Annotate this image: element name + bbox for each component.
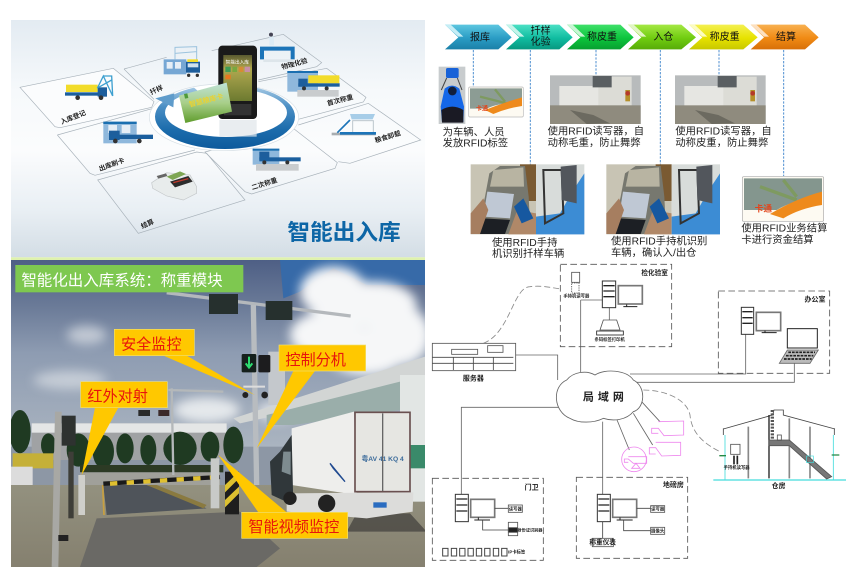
truck	[270, 412, 427, 532]
callout: infrared beam	[81, 382, 167, 475]
caption: tare weighing: 动称皮重，防止舞弊	[675, 136, 768, 149]
chevron: settlement	[751, 25, 819, 49]
tile: vehicle registration: 入库登记	[59, 108, 87, 126]
room: gate: IP卡标签	[508, 549, 526, 556]
icon: first weighbridge truck	[287, 71, 340, 97]
caption: gross weighing: 使用RFID读写器，自	[548, 125, 644, 138]
icon: lab bench with person	[260, 33, 295, 62]
callout: safety monitoring	[114, 329, 255, 395]
chevron: report	[445, 25, 512, 49]
tile: lab test	[212, 34, 322, 80]
panel: intelligent warehousing diagram	[11, 20, 425, 261]
tile: sampling	[124, 57, 167, 99]
wireless links	[483, 286, 720, 452]
caption: gross weighing: 动称毛重，防止舞弊	[548, 136, 641, 149]
callout: infrared beam: 红外对射	[87, 388, 148, 405]
photo background: sky and scene	[9, 260, 430, 567]
panel: RFID process flow	[439, 24, 827, 260]
chevron: enter warehouse: 入仓	[653, 30, 673, 43]
tile: exit card: 出库刷卡	[97, 155, 126, 173]
chevron: sampling and testing: 扦样	[531, 24, 551, 37]
caption: issue RFID tags: 为车辆、人员	[443, 126, 505, 139]
room: weighbridge: 摄像头	[651, 527, 665, 534]
caption: settlement card: 使用RFID业务结算	[741, 222, 827, 235]
photo: blue RFID tag	[439, 67, 465, 124]
photo: small RFID card: 卡通	[476, 105, 488, 113]
caption: handheld identifies sampling vehicles: 使用RFID手持	[492, 236, 557, 249]
tile: vehicle registration	[20, 68, 154, 128]
icon: second weighbridge truck	[253, 149, 301, 171]
chevron: enter warehouse	[628, 25, 696, 49]
LAN cloud	[556, 371, 643, 422]
server: 服务器	[463, 374, 484, 383]
callout: safety monitoring: 安全监控	[121, 335, 182, 353]
callout: smart video monitoring	[218, 455, 348, 538]
caption: handheld confirms warehouse entry: 车辆，确认入/出仓	[611, 246, 697, 259]
room: gate	[432, 478, 543, 560]
network lines	[461, 300, 794, 494]
photo: weighbridge station gross	[550, 75, 641, 124]
room: lab: 检化验室	[641, 268, 668, 277]
icon: loading rack truck	[65, 76, 113, 100]
caption: issue RFID tags: 发放RFID标签	[443, 136, 508, 149]
tile: settlement: 结算	[139, 217, 156, 231]
caption: tare weighing: 使用RFID读写器，自	[675, 125, 772, 138]
pink cameras	[622, 421, 684, 472]
chevron: weigh tare	[689, 25, 758, 49]
caption: handheld identifies sampling vehicles: 机识别扦样车辆	[492, 247, 564, 260]
callout: control unit	[257, 345, 366, 448]
room: weighbridge: 读写器	[651, 506, 665, 513]
tile: second weighing	[205, 128, 337, 194]
central ring arrow	[149, 84, 299, 151]
tile: sampling: 扦样	[148, 83, 165, 97]
chevron: weigh gross	[567, 25, 634, 49]
left pole and sign	[55, 412, 82, 567]
banner: weighing module title: 智能化出入库系统：称重模块	[21, 272, 223, 290]
room: lab: 手持机读写器	[563, 292, 590, 299]
panel: network topology diagram	[432, 264, 846, 560]
caption: tare weighing	[675, 125, 772, 149]
icon: card printer	[152, 171, 197, 200]
chevron: report: 报库	[470, 31, 490, 44]
traffic pole and signals	[138, 293, 351, 485]
photo: settlement card: 卡通	[755, 203, 772, 214]
panel: weighing module photo	[9, 260, 430, 567]
photo: weighbridge station tare	[675, 75, 766, 124]
caption: settlement card	[741, 222, 827, 246]
chevron: weigh tare: 称皮重	[710, 30, 740, 43]
tile: first weighing: 首次称重	[326, 92, 354, 108]
chevron: sampling and testing	[506, 24, 573, 49]
chevron: weigh gross: 称皮重	[587, 30, 617, 43]
chevron: settlement: 结算	[776, 30, 796, 43]
icon: exit booth truck	[103, 122, 153, 143]
handheld terminal	[218, 46, 257, 137]
LAN cloud: 局域网	[583, 390, 628, 404]
banner: weighing module title	[15, 265, 243, 292]
tile: exit card	[57, 108, 195, 175]
caption: handheld confirms warehouse entry	[611, 235, 707, 259]
room: weighbridge	[576, 477, 688, 558]
truck: 粤AV 41 KQ 4	[362, 454, 404, 463]
smart card: 智慧粮库卡	[188, 92, 224, 109]
callout: smart video monitoring: 智能视频监控	[248, 518, 339, 536]
caption: issue RFID tags	[443, 126, 508, 149]
heading: intelligent warehousing: 智能出入库	[287, 220, 401, 245]
caption: settlement card: 卡进行资金结算	[741, 233, 814, 246]
photo: small RFID card	[469, 87, 523, 117]
tile: unloading: 粮食卸载	[374, 128, 402, 145]
room: gate: 身份证识别器	[518, 527, 543, 533]
tile: lab test: 物理化验	[280, 56, 309, 71]
tile: second weighing: 二次称重	[250, 175, 279, 192]
room: lab	[560, 264, 672, 347]
tile: first weighing	[258, 68, 366, 119]
smart card	[179, 83, 232, 123]
tile: unloading	[298, 103, 421, 163]
callout: control unit: 控制分机	[285, 352, 346, 369]
caption: handheld identifies sampling vehicles	[492, 236, 564, 260]
dashed connectors	[473, 50, 784, 176]
handheld terminal: 智能出入库	[226, 58, 249, 65]
tile: settlement	[98, 152, 245, 233]
photo: handheld reading tag, warehouse	[606, 164, 720, 234]
room: weighbridge: 地磅房	[663, 480, 684, 489]
room: office	[718, 291, 830, 373]
warehouse: 手持机读写器	[724, 464, 750, 471]
room: gate: 门卫	[525, 483, 539, 492]
icon: sampling booth and truck	[164, 47, 200, 77]
photo: settlement card	[742, 177, 824, 221]
warehouse	[713, 410, 846, 490]
room: lab: 条码标签打印机	[595, 336, 625, 343]
server	[432, 343, 516, 383]
room: weighbridge: 称重仪表	[589, 537, 616, 546]
chevron: sampling and testing: 化验	[531, 35, 551, 48]
room: office: 办公室	[805, 295, 825, 304]
room: gate: 读写器	[509, 505, 522, 512]
icon: unloading platform	[332, 114, 376, 135]
caption: gross weighing	[548, 125, 644, 149]
warehouse: 仓房	[772, 481, 786, 490]
photo: handheld reading tag, sampling	[471, 164, 584, 234]
building canopy	[233, 352, 425, 502]
caption: handheld confirms warehouse entry: 使用RFID手持机识别	[611, 235, 707, 248]
